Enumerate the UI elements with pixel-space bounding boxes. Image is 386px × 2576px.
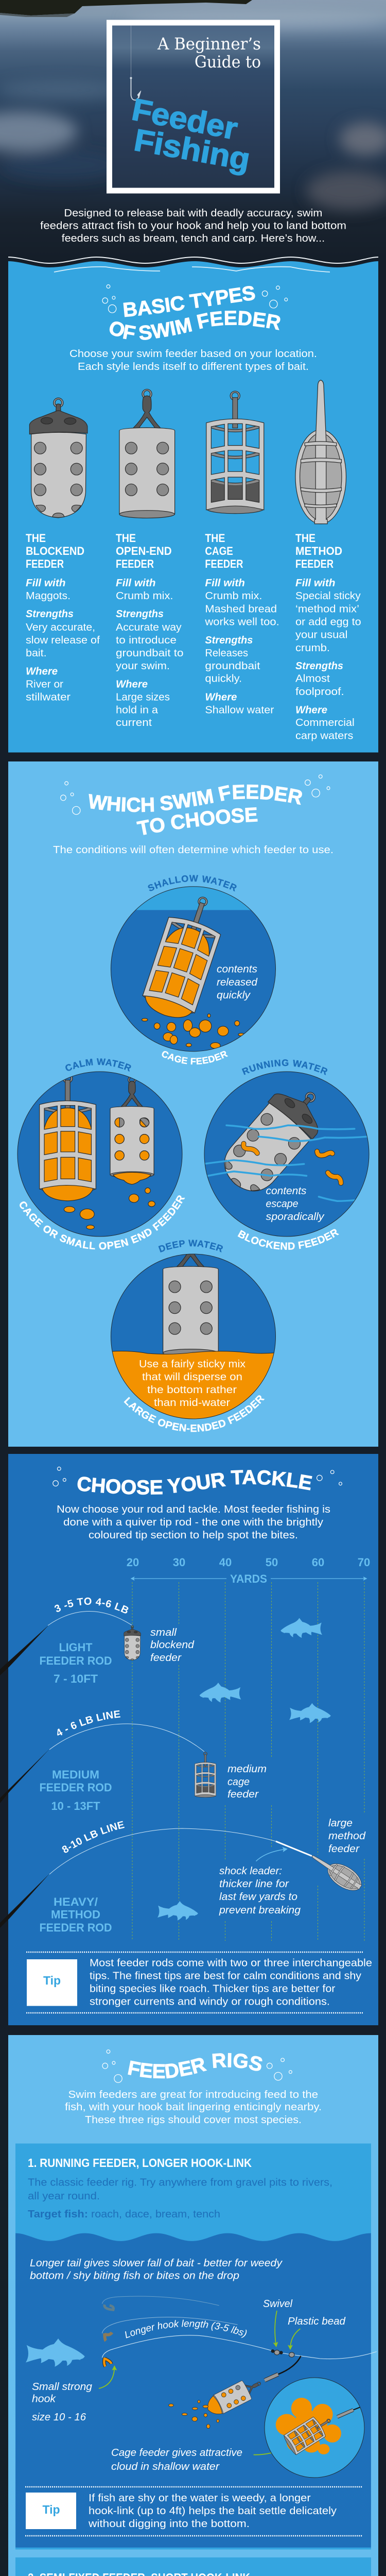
column: open-end feeder: THE [116,532,136,545]
label: contents escape sporadically: escape [266,1198,299,1210]
arc label: cage or small open end feeder: CAGE OR SMALL OPEN END FEEDER [20,1195,185,1250]
heading: basic types of swim feeder: BASIC TYPES [124,286,255,317]
label: contents released quickly: released [217,977,258,988]
bubbles [61,775,330,815]
tip box: interchangeable rod tips: biting species like roach. Thicker tips are better for [90,1984,336,1995]
label: shock leader: shock leader: [219,1866,282,1877]
section intro: These three rigs should cover most species. [85,2114,302,2126]
section intro: done with a quiver tip rod - the one with the brightly [63,1517,323,1528]
rig 1: running feeder, longer hook-link [15,2143,377,2549]
bubbles [53,1467,342,1486]
column: open-end feeder: hold in a [116,705,159,716]
column: open-end feeder: OPEN-END [116,545,172,557]
label: small blockend feeder: small [150,1627,177,1638]
label: contents released quickly: contents [217,963,257,975]
heading: basic types of swim feeder [109,286,280,340]
column: open-end feeder: current [116,717,152,728]
column: cage feeder: Strengths [205,635,253,646]
column: open-end feeder: Accurate way [116,622,182,633]
column: cage feeder: works well too. [204,616,279,628]
tip box: longer hook-link: without digging into the bottom. [88,2518,250,2530]
label: heavy method feeder rod [39,1895,112,1934]
column: open-end feeder: Strengths [116,608,164,620]
label: medium cage feeder: medium [227,1764,267,1775]
section intro [57,1504,330,1541]
label: heavy method feeder rod: METHOD [51,1908,100,1921]
heading: choose your tackle: CHOOSE YOUR TACKLE [77,1470,312,1495]
heading: basic types of swim feeder: OF SWIM FEEDER [109,311,280,340]
column: blockend feeder: slow release of [26,635,100,646]
column: blockend feeder: FEEDER [26,557,64,570]
label: contents released quickly [217,963,258,1001]
tip box: interchangeable rod tips: Most feeder rods come with two or three interchangeable [90,1958,372,1969]
chart: yards scale: 20 [127,1556,139,1569]
column: method feeder: or add egg to [295,616,361,628]
section intro: Each style lends itself to different types of bait. [78,361,309,372]
intro text: feeders such as bream, tench and carp. Here’s how... [62,233,325,244]
column: cage feeder: Shallow water [205,705,274,716]
arc label: cage feeder: CAGE FEEDER [162,1051,229,1064]
column: method feeder: foolproof. [295,686,344,698]
icon: small blockend feeder [124,1625,141,1660]
icon: fishing hook [130,25,141,100]
title: Feeder Fishing [129,92,253,177]
arc label: shallow water: SHALLOW WATER [148,875,237,891]
column: method feeder: METHOD [295,545,342,557]
column: open-end feeder: to introduce [116,635,177,646]
fish silhouette [26,2338,85,2367]
tip box: interchangeable rod tips [26,1952,372,2013]
label: sticky mix advice: the bottom rather [147,1384,237,1396]
label: contents released quickly: quickly [217,990,251,1001]
column: blockend feeder: bait. [26,648,47,659]
panel: feeder rigs [8,2035,378,2576]
label: shock leader: last few yards to [219,1891,297,1903]
intro text: feeders attract fish to your hook and help you to land bottom [40,221,346,232]
column: blockend feeder [26,532,100,703]
column: method feeder: your usual [295,630,347,641]
label: small blockend feeder: feeder [150,1652,182,1664]
note: longer tail [30,2258,283,2281]
column: method feeder: carp waters [295,731,353,742]
title card [109,23,277,191]
label: medium feeder rod: FEEDER ROD [39,1781,112,1794]
section intro: Now choose your rod and tackle. Most feeder fishing is [57,1504,330,1515]
rig 2: semi-fixed feeder, short hook-link [15,2557,386,2576]
note: longer tail: Longer tail gives slower fall of bait - better for weedy [30,2258,283,2269]
column: method feeder: THE [295,532,315,545]
label: large method feeder: large [328,1818,353,1829]
label: sticky mix advice [139,1359,245,1409]
column: open-end feeder: Large sizes [116,691,170,703]
arc label: blockend feeder: BLOCKEND FEEDER [238,1229,339,1250]
rig description: Target fish: [28,2209,88,2220]
column: method feeder: Strengths [295,660,343,672]
column: blockend feeder: Fill with [26,578,66,589]
arc label: running water: RUNNING WATER [242,1059,327,1075]
column: method feeder: ‘method mix’ [295,604,359,615]
diagram: hook links and main line [102,2296,377,2380]
bubbles [102,2050,292,2082]
column: cage feeder: CAGE [205,545,233,557]
tip box: interchangeable rod tips: Tip [43,1974,61,1987]
label: swivel: Swivel [263,2298,293,2310]
label: shock leader: thicker line for [219,1878,289,1890]
column: blockend feeder: THE [26,532,46,545]
line rating: 4 - 6 LB LINE [57,1710,120,1736]
label: contents escape sporadically [266,1185,325,1223]
panel: which swim feeder to choose [8,761,378,1447]
label: medium cage feeder: feeder [227,1789,259,1800]
column: blockend feeder: River or [26,679,63,690]
column: method feeder: crumb. [295,642,330,654]
label: sticky mix advice: than mid-water [154,1397,230,1409]
section intro [65,2089,322,2126]
icon: open-end feeder [119,389,175,518]
label: cage feeder gives attractive cloud: cloud in shallow water [111,2461,220,2472]
column: method feeder: Almost [295,673,330,685]
label: medium cage feeder: cage [227,1776,250,1788]
circle: deep water [111,1240,276,1432]
label: small strong hook: Small strong [32,2381,92,2393]
icon: method feeder [295,380,346,524]
label: light feeder rod: 7 - 10FT [54,1672,98,1685]
section intro: Choose your swim feeder based on your location. [69,348,317,360]
column: method feeder: Commercial [295,717,355,728]
column: cage feeder: Where [205,691,237,703]
heading: feeder rigs: FEEDER RIGS [128,2053,262,2078]
heading: which swim feeder to choose: TO CHOOSE [136,807,258,835]
fish silhouettes [157,1618,331,1921]
section intro: Swim feeders are great for introducing feed to the [68,2089,318,2100]
note: longer tail: bottom / shy biting fish or bites on the drop [30,2270,239,2281]
label: cage feeder gives attractive cloud [111,2447,242,2472]
tip box: longer hook-link: hook-link (up to 4ft) helps the bait settle delicately [89,2505,337,2517]
label: shock leader: prevent breaking [219,1905,301,1916]
column: method feeder: Where [295,705,327,716]
column: method feeder: FEEDER [295,557,334,570]
title: A Beginner's Guide to [157,34,261,72]
column: cage feeder: Crumb mix. [205,590,262,602]
label: shock leader [219,1866,301,1916]
arrow: to shock leader [256,1849,287,1861]
label: large method feeder: method [328,1831,366,1842]
line rating: 3 -5 TO 4-6 LB [55,1597,129,1614]
tip box: interchangeable rod tips: stronger currents and windy or rough conditions. [90,1996,330,2007]
rig description: roach, dace, bream, tench [91,2209,220,2220]
label: heavy method feeder rod: FEEDER ROD [39,1921,112,1934]
label: small strong hook: hook [32,2394,56,2405]
label: cage feeder gives attractive cloud: Cage feeder gives attractive [111,2447,242,2459]
intro text [40,208,346,244]
label: medium feeder rod [39,1768,112,1812]
column: cage feeder: groundbait [205,660,260,672]
bubbles [102,285,288,313]
column: blockend feeder: Strengths [26,608,74,620]
column: cage feeder: Mashed bread [205,604,277,615]
tip box: longer hook-link: If fish are shy or the water is weedy, a longer [89,2493,311,2504]
rig description [28,2177,332,2220]
section intro: fish, with your hook bait lingering enticingly nearby. [65,2102,322,2113]
tip box: longer hook-link: Tip [42,2503,60,2516]
arc label: large open-ended feeder: LARGE OPEN-ENDED FEEDER [124,1395,265,1432]
label: large method feeder: feeder [328,1843,360,1855]
column: cage feeder: FEEDER [205,557,243,570]
column: cage feeder [204,532,279,716]
label: plastic bead: Plastic bead [288,2316,346,2327]
label: small blockend feeder: blockend [150,1639,195,1651]
circle: running water [204,1059,370,1250]
title: Feeder Fishing: Fishing [132,123,253,177]
title: A Beginner's Guide to: Guide to [195,52,261,72]
chart: yards scale: 30 [173,1556,185,1569]
label: sticky mix advice: that will disperse on [142,1371,242,1383]
column: method feeder: Special sticky [295,590,361,602]
chart: yards scale: 50 [266,1556,278,1569]
column: open-end feeder: Where [116,679,148,690]
panel: basic types of swim feeder [8,257,378,752]
circle: shallow water [111,875,276,1064]
column: method feeder [295,532,361,742]
label: small strong hook [32,2381,92,2423]
column: open-end feeder: groundbait to [116,648,183,659]
column: cage feeder: quickly. [205,673,242,685]
column: cage feeder: Releases [205,648,248,659]
label: contents escape sporadically: contents [266,1185,307,1197]
column: cage feeder: THE [205,532,225,545]
icon: blockend feeder [29,398,87,518]
label: heavy method feeder rod: HEAVY/ [54,1895,98,1908]
label: sticky mix advice: Use a fairly sticky mix [139,1359,245,1370]
label: medium feeder rod: 10 - 13FT [51,1800,100,1812]
header photo: lake reflection [0,0,386,258]
column: blockend feeder: BLOCKEND [26,545,84,557]
rod: light feeder rod [0,1597,195,1685]
icon: open-end feeder releasing pellets [169,2374,265,2429]
column: blockend feeder: stillwater [26,691,71,703]
rig title: 1. RUNNING FEEDER, LONGER HOOK-LINK [28,2156,252,2170]
heading: which swim feeder to choose: WHICH SWIM FEEDER [89,784,302,812]
label: small strong hook: size 10 - 16 [32,2412,86,2423]
rig description: The classic feeder rig. Try anywhere from gravel pits to rivers, [28,2177,332,2189]
inset: cage feeder cloud [265,2378,364,2478]
column: open-end feeder: Fill with [116,578,155,589]
label: longer hook length: Longer hook length (3-5 lbs) [125,2319,247,2338]
column: open-end feeder: Crumb mix. [116,590,173,602]
line rating: 8-10 LB LINE [62,1821,125,1853]
arc label: deep water: DEEP WATER [159,1240,223,1252]
heading: which swim feeder to choose [89,784,302,835]
column: blockend feeder: Very accurate, [26,622,95,633]
column: method feeder: Fill with [295,578,336,589]
label: medium cage feeder [227,1764,267,1800]
column: open-end feeder: FEEDER [116,557,154,570]
column: open-end feeder: your swim. [116,660,170,672]
arrows: rig 1 callouts [99,2311,301,2455]
rod: medium feeder rod [0,1710,267,1812]
chart: yards scale: 70 [358,1556,370,1569]
column: blockend feeder: Where [26,666,58,677]
label: medium feeder rod: MEDIUM [52,1768,99,1781]
column: open-end feeder [116,532,183,728]
label: light feeder rod: LIGHT [59,1641,93,1654]
icon: cage feeder [206,391,264,514]
arc label: calm water: CALM WATER [65,1058,131,1072]
column: cage feeder: Fill with [205,578,245,589]
chart: yards scale: 40 [219,1556,232,1569]
chart: yards scale [127,1556,370,1941]
label: light feeder rod [39,1641,112,1685]
rod: heavy method feeder rod [0,1818,366,1934]
label: light feeder rod: FEEDER ROD [39,1654,112,1667]
panel: choose your tackle [0,1454,378,2025]
title: Feeder Fishing: Feeder [129,92,240,146]
chart: yards scale: YARDS [230,1572,267,1585]
rig description: all year round. [28,2191,100,2202]
icon: large method feeder [307,1848,366,1896]
title: A Beginner's Guide to: A Beginner’s [157,34,261,54]
label: contents escape sporadically: sporadically [266,1211,325,1223]
label: small blockend feeder [150,1627,195,1664]
intro text: Designed to release bait with deadly accuracy, swim [64,208,322,219]
tip box: interchangeable rod tips: tips. The finest tips are best for calm conditions and shy [90,1970,361,1981]
section intro: coloured tip section to help spot the bites. [89,1530,298,1541]
section intro: The conditions will often determine which feeder to use. [53,844,334,856]
label: large method feeder [328,1818,366,1855]
tip box: longer hook-link [25,2487,362,2536]
icon: medium cage feeder [195,1752,216,1798]
column: blockend feeder: Maggots. [26,590,71,602]
circle: calm water [17,1058,185,1250]
chart: yards scale: 60 [312,1556,324,1569]
section intro [69,348,317,372]
